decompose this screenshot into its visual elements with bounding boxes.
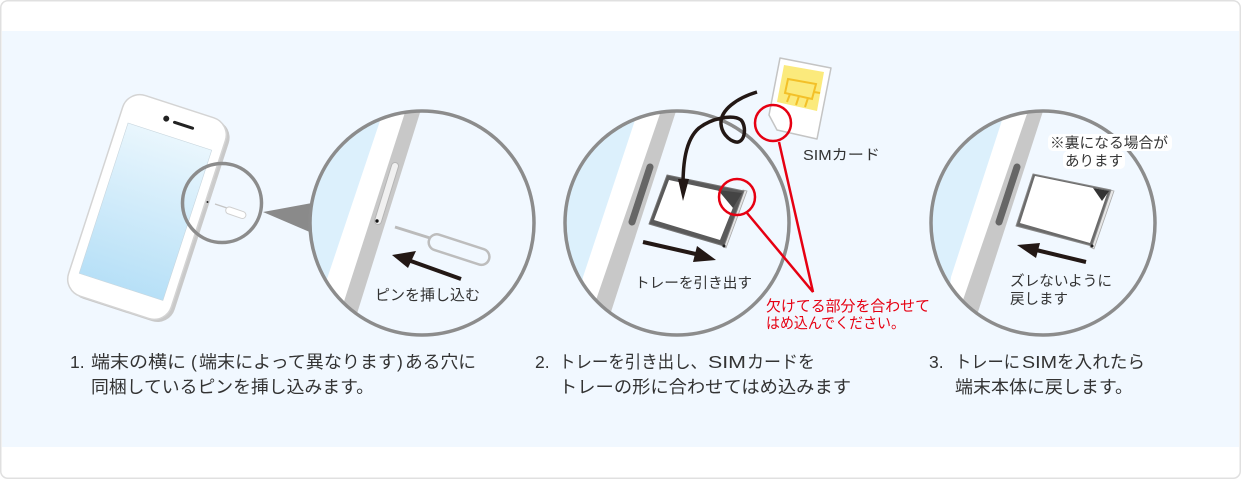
caption: step 1 — [70, 352, 476, 397]
label: pull out tray: トレーを引き出す — [635, 275, 752, 292]
red note: はめ込んでください。 — [766, 315, 905, 332]
caption: step 1: ある穴に — [405, 352, 476, 372]
caption: step 2 — [535, 352, 851, 397]
label: pin: ピンを挿し込む — [375, 287, 480, 304]
label: return tray — [1010, 273, 1112, 308]
panel: step 2 illustration — [563, 57, 928, 337]
SIM tray — [649, 175, 747, 248]
caption: step 1: 同梱しているピンを挿し込みます。 — [91, 377, 374, 397]
note: may be reversed: ※裏になる場合が — [1050, 135, 1169, 152]
caption: step 2: トレーの形に合わせてはめ込みます — [559, 377, 851, 397]
red callout lines and circles — [719, 105, 813, 292]
zoom circle on phone side — [182, 164, 262, 242]
magnified circle 1 — [308, 109, 536, 337]
SIM tray with card — [1016, 174, 1114, 249]
icon: SIM card — [769, 58, 831, 139]
label: return tray: 戻します — [1010, 291, 1068, 308]
SIM tray slot — [378, 166, 395, 221]
caption: step 3: トレーに — [955, 352, 1020, 372]
caption: step 1: 1. — [70, 352, 85, 372]
caption: step 3: 端末本体に戻します。 — [955, 377, 1133, 397]
caption: step 3 — [929, 352, 1145, 397]
arrow: curved loop to tray — [678, 92, 757, 201]
note: may be reversed — [1048, 134, 1172, 170]
caption: step 1: ( — [191, 352, 197, 372]
caption: step 1: 端末の横に — [91, 352, 186, 372]
panel: step 3 illustration — [929, 109, 1172, 337]
caption: step 2: 2. — [535, 352, 550, 372]
magnified circle 3 — [929, 109, 1157, 337]
icon: smartphone — [63, 90, 235, 327]
arrow: return tray — [1017, 243, 1086, 262]
tray slot — [632, 167, 650, 222]
arrow: pull out tray — [643, 242, 716, 262]
caption: step 1: 端末によって異なります — [199, 352, 396, 372]
caption: step 3: 3. — [929, 352, 944, 372]
caption: step 1: ) — [397, 352, 403, 372]
label: SIM card: SIMカード — [803, 148, 880, 164]
label: return tray: ズレないように — [1010, 273, 1112, 290]
caption: step 2: カードを — [747, 352, 815, 372]
caption: step 3: を入れたら — [1057, 352, 1145, 372]
tray slot — [999, 167, 1017, 222]
caption: step 3: SIM — [1022, 352, 1057, 372]
panel: step 1 illustration — [63, 90, 534, 335]
caption: step 2: SIM — [708, 352, 746, 372]
magnified circle 2 — [563, 109, 791, 337]
note: may be reversed: あります — [1065, 153, 1123, 170]
icon: SIM pin — [395, 227, 491, 267]
callout pointer triangle — [263, 203, 312, 233]
red note — [766, 298, 930, 332]
arrow: insert pin — [392, 251, 461, 279]
red note: 欠けてる部分を合わせて — [766, 298, 930, 315]
caption: step 2: トレーを引き出し、 — [559, 352, 707, 372]
